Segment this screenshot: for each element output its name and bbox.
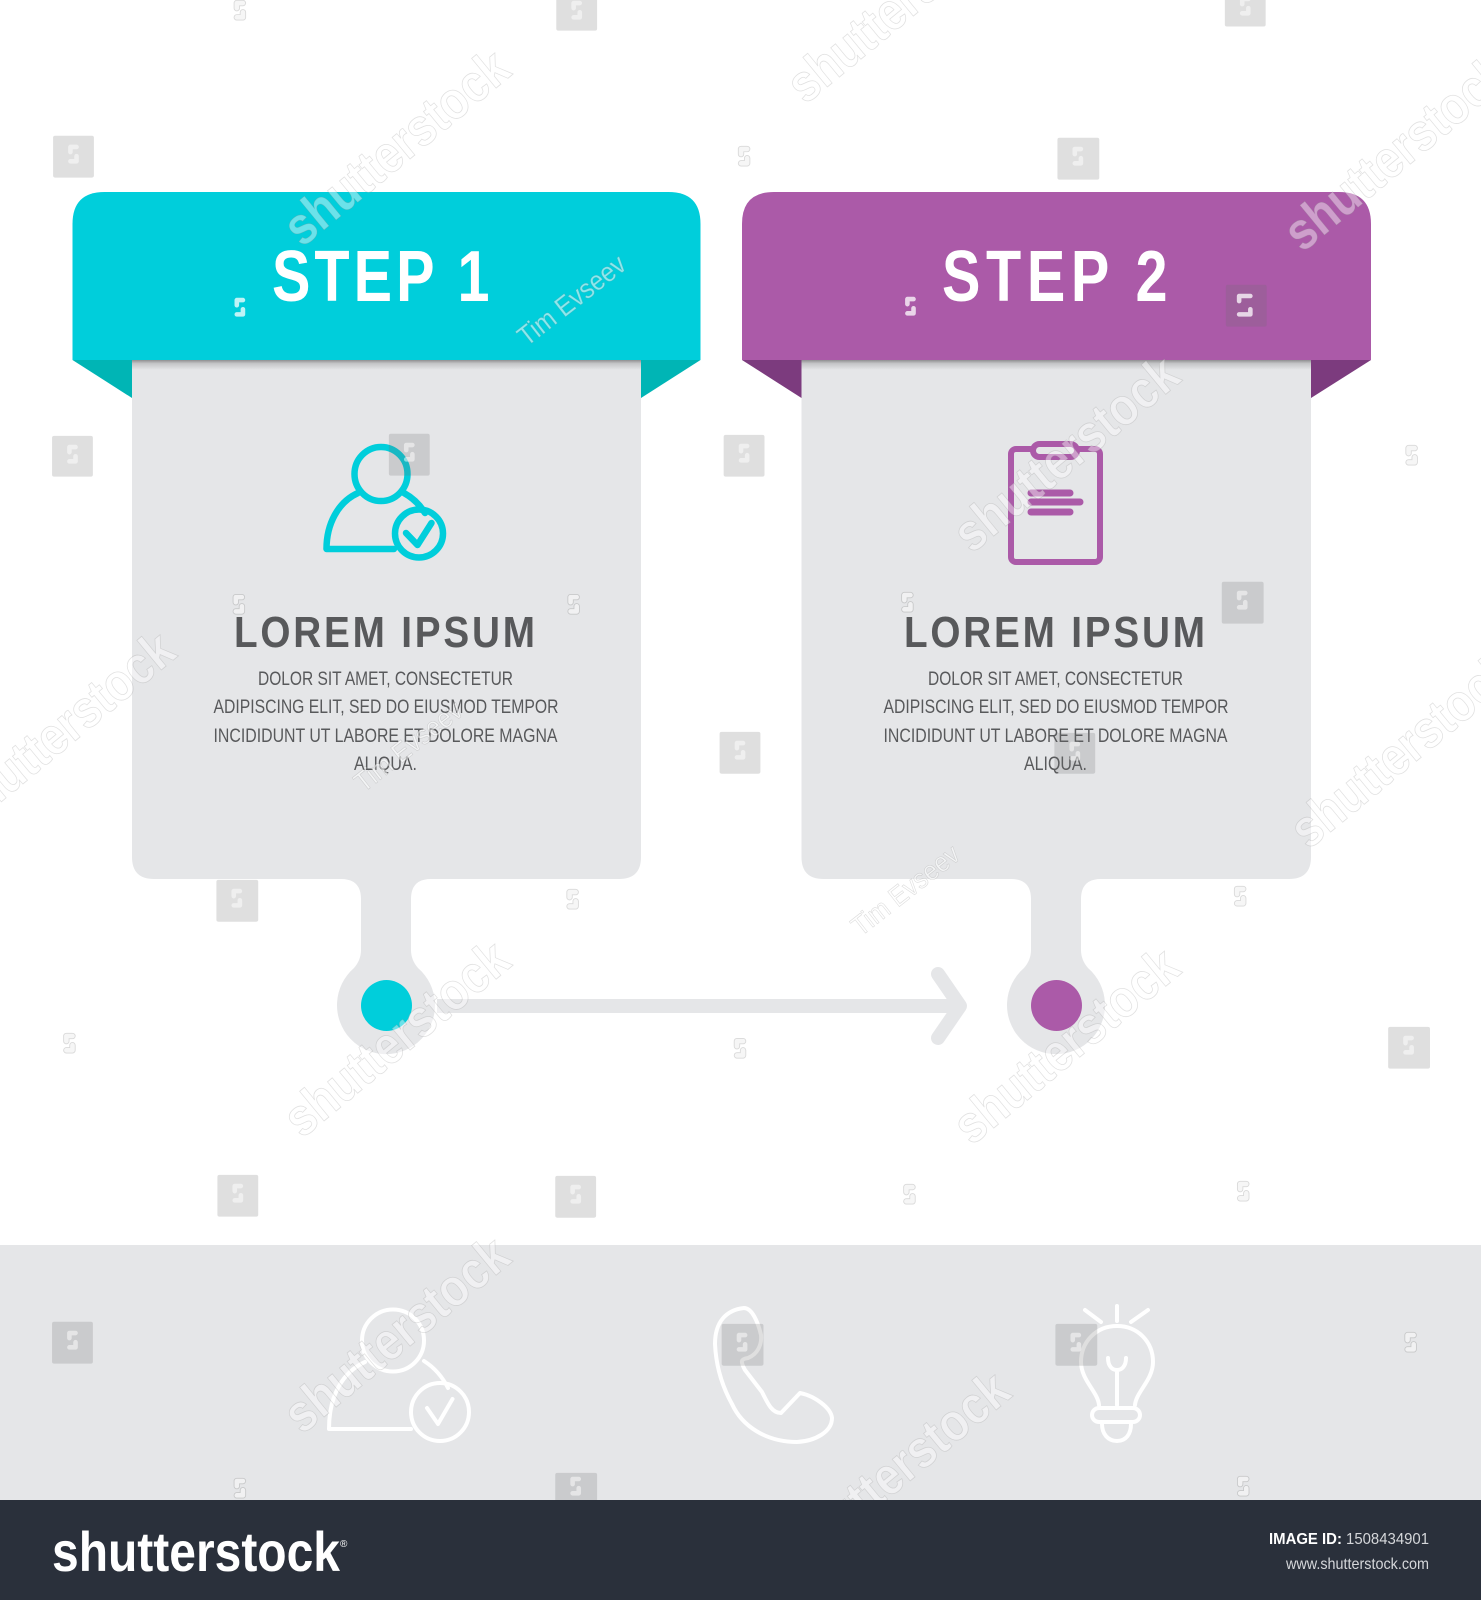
card body text: INCIDIDUNT UT LABORE ET DOLORE MAGNA <box>214 725 558 747</box>
footer bar <box>0 1500 1481 1600</box>
node dot: step 1 <box>361 980 412 1031</box>
card with stem and node <box>132 360 641 1054</box>
watermark overlay: shutterstock <box>272 929 521 1148</box>
card title: LOREM IPSUM <box>234 607 535 657</box>
icon: user with check mark <box>326 447 443 558</box>
watermark overlay: shutterstock <box>272 37 521 257</box>
card with stem and node <box>802 360 1311 1054</box>
card body text: DOLOR SIT AMET, CONSECTETUR <box>258 668 513 690</box>
card body text: INCIDIDUNT UT LABORE ET DOLORE MAGNA <box>884 725 1228 747</box>
watermark overlay: Tim Evseev <box>348 694 469 798</box>
heading: step 2: STEP 2 <box>942 236 1168 316</box>
card body text: ALIQUA. <box>1024 753 1087 775</box>
panel: step 2 <box>742 192 1371 1054</box>
ribbon fold right <box>1311 360 1371 398</box>
card body text: ADIPISCING ELIT, SED DO EIUSMOD TEMPOR <box>884 696 1228 718</box>
watermark overlay: shutterstock <box>772 1359 1021 1579</box>
ribbon shadow <box>132 360 641 370</box>
icon: clipboard <box>1011 444 1100 562</box>
icon: telephone handset <box>715 1308 832 1442</box>
website url: www.shutterstock.com <box>1285 1556 1429 1573</box>
registered mark: ® <box>340 1539 348 1550</box>
footer background <box>0 1500 1481 1600</box>
icon: light bulb <box>1081 1306 1153 1441</box>
watermark overlay: shutterstock <box>942 936 1191 1156</box>
panel: step 1 <box>72 192 700 1054</box>
watermark overlay: shutterstock <box>272 1225 521 1444</box>
watermark overlay: Tim Evseev <box>511 248 632 352</box>
card body text <box>214 668 558 775</box>
watermark overlay: Tim Evseev <box>845 838 966 942</box>
ribbon header <box>72 192 700 360</box>
card body text <box>884 668 1228 775</box>
ribbon fold left <box>72 360 132 398</box>
arrow from step 1 to step 2 <box>437 974 960 1038</box>
card body text: ALIQUA. <box>354 753 417 775</box>
heading: step 1: STEP 1 <box>272 236 490 316</box>
ribbon header <box>742 192 1371 360</box>
card body text: DOLOR SIT AMET, CONSECTETUR <box>928 668 1183 690</box>
icon row in band <box>329 1306 1153 1442</box>
card title: LOREM IPSUM <box>904 607 1205 657</box>
card body text: ADIPISCING ELIT, SED DO EIUSMOD TEMPOR <box>214 696 558 718</box>
footer logo: shutterstock <box>52 1520 341 1583</box>
image id: IMAGE ID: 1508434901 <box>1269 1531 1429 1548</box>
ribbon fold right <box>641 360 700 398</box>
ribbon fold left <box>742 360 802 398</box>
watermark overlay: shutterstock <box>942 344 1191 563</box>
icon: user with check mark outline <box>329 1310 469 1441</box>
ribbon shadow <box>802 360 1311 370</box>
bottom icon band <box>0 1245 1481 1501</box>
node dot: step 2 <box>1031 980 1082 1031</box>
